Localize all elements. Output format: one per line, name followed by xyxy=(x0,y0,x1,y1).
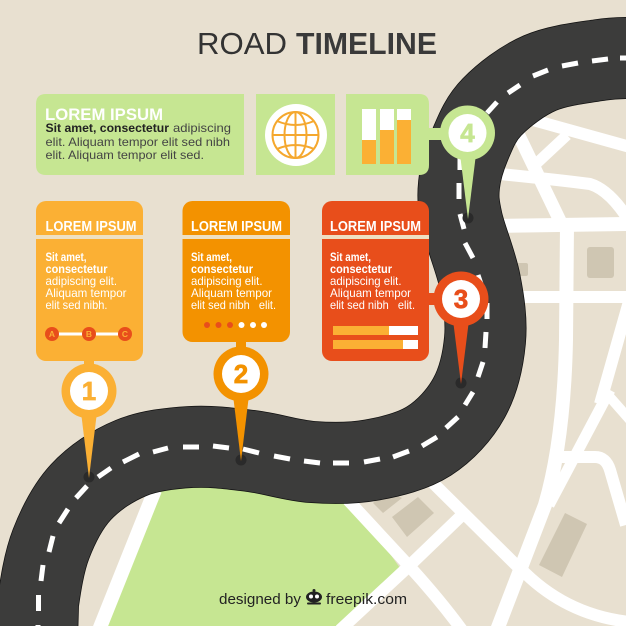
title: TIMELINE xyxy=(296,26,437,61)
footer credit: freepik.com xyxy=(326,591,407,608)
A B C timeline: C xyxy=(122,329,128,339)
panel: globe icon xyxy=(256,94,335,175)
panel: intro text: LOREM IPSUM xyxy=(45,105,163,124)
panel: card 1: elit sed nibh. xyxy=(46,298,108,312)
pin 3: 3 xyxy=(454,284,468,314)
pin 1 xyxy=(62,364,116,482)
pin 4 xyxy=(440,106,495,224)
panel: card 3: consectetur xyxy=(330,262,392,276)
icon: globe xyxy=(272,112,318,158)
panel: intro text xyxy=(36,94,244,175)
panel: intro text: elit. Aliquam tempor elit sed. xyxy=(46,148,204,162)
footer credit xyxy=(219,589,407,608)
panel: card 2: adipiscing elit. xyxy=(191,274,262,288)
panel: bar chart connected to pin 4 xyxy=(346,94,448,175)
pin 4: 4 xyxy=(460,118,475,148)
pin 2: 2 xyxy=(234,359,248,389)
panel: card 2: Sit amet, xyxy=(191,250,232,264)
panel: card 3: Sit amet, xyxy=(330,250,371,264)
panel: intro text: adipiscing xyxy=(173,121,231,135)
panel: card 1 xyxy=(36,201,143,372)
footer credit: designed by xyxy=(219,591,301,608)
panel: card 1: consectetur xyxy=(46,262,108,276)
pin 2 xyxy=(214,346,268,466)
park: green area xyxy=(105,480,400,626)
panel: card 1: adipiscing elit. xyxy=(46,274,117,288)
map buildings xyxy=(373,247,614,577)
panel: card 3: elit sed nibh elit. xyxy=(330,298,415,312)
panel: card 3: adipiscing elit. xyxy=(330,274,402,288)
panel: card 2: Aliquam tempor xyxy=(191,286,272,300)
panel: card 1: Sit amet, xyxy=(46,250,86,264)
progress bars xyxy=(333,326,418,349)
A B C timeline xyxy=(45,327,132,341)
panel: intro text: Sit amet, consectetur xyxy=(46,121,169,135)
panel: card 2: consectetur xyxy=(191,262,253,276)
title: ROAD xyxy=(197,26,287,61)
pin 1: 1 xyxy=(82,376,96,406)
rating dots xyxy=(204,322,267,328)
panel: card 2: LOREM IPSUM xyxy=(191,219,282,235)
A B C timeline: B xyxy=(86,329,92,339)
panel: intro text: elit. Aliquam tempor elit sed nibh xyxy=(46,135,230,149)
panel: card 2: elit sed nibh elit. xyxy=(191,298,276,312)
panel: card 1: LOREM IPSUM xyxy=(46,219,136,235)
pin 3 xyxy=(434,272,488,388)
icon: freepik logo xyxy=(306,589,322,604)
map streets xyxy=(99,115,626,626)
bar chart xyxy=(362,109,411,164)
panel: card 3: Aliquam tempor xyxy=(330,286,411,300)
panel: card 2 xyxy=(182,201,290,353)
panel: card 3: LOREM IPSUM xyxy=(330,219,421,235)
A B C timeline: A xyxy=(49,329,55,339)
title xyxy=(197,26,437,61)
panel: card 1: Aliquam tempor xyxy=(46,286,126,300)
panel: card 3 xyxy=(322,201,442,361)
